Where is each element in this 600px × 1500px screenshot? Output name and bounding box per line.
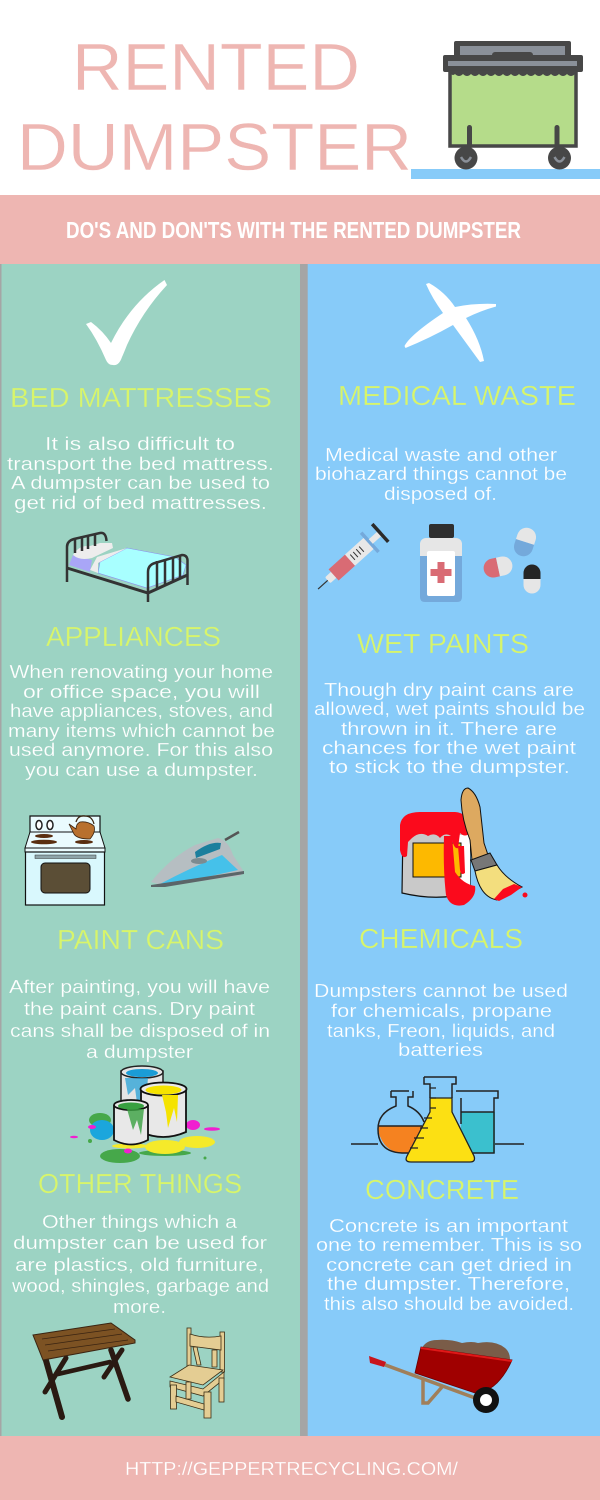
text: paint cans: cans shall be disposed of in (10, 1021, 270, 1041)
text: other things: more. (113, 1297, 166, 1317)
icon: paint cans with splatter (70, 1066, 220, 1163)
title: RENTED (72, 30, 360, 105)
text: other things: are plastics, old furniture, (15, 1255, 264, 1275)
text: bed mattresses: A dumpster can be used to (11, 473, 270, 493)
text: appliances (8, 662, 275, 780)
text: wet paints: allowed, wet paints should be (314, 699, 585, 719)
icon: syringe (309, 522, 390, 599)
text: wet paints: thrown in it. There are (341, 719, 557, 739)
text: chemicals (314, 981, 568, 1060)
text: concrete: one to remember. This is so (316, 1235, 582, 1255)
icon: cross mark (404, 283, 496, 362)
icon: check mark (86, 280, 167, 365)
text: other things: wood, shingles, garbage and (11, 1276, 269, 1296)
text: paint cans (9, 977, 270, 1062)
text: wet paints: Though dry paint cans are (324, 680, 574, 700)
blue ground bar (411, 169, 600, 179)
title (17, 30, 412, 185)
heading: chemicals: CHEMICALS (359, 923, 523, 954)
text: paint cans: the paint cans. Dry paint (24, 999, 255, 1019)
panel: do's (0, 264, 300, 1436)
text: appliances: used anymore. For this also (9, 740, 273, 760)
footer band: HTTP://GEPPERTRECYCLING.COM/ (125, 1459, 458, 1479)
text: wet paints (314, 680, 585, 777)
heading: medical waste: MEDICAL WASTE (338, 380, 576, 411)
icon: bed (67, 533, 188, 602)
text: medical waste: biohazard things cannot be (315, 464, 567, 484)
text: concrete (316, 1216, 582, 1314)
text: chemicals: Dumpsters cannot be used (314, 981, 568, 1001)
heading: concrete: CONCRETE (365, 1174, 519, 1205)
heading: bed mattresses: BED MATTRESSES (10, 382, 272, 413)
text: concrete: the dumpster. Therefore, (327, 1274, 570, 1294)
subtitle band (0, 195, 600, 264)
text: paint cans: After painting, you will have (9, 977, 270, 997)
column divider (300, 264, 308, 1436)
text: wet paints: chances for the wet paint (322, 738, 576, 758)
text: other things (11, 1212, 269, 1317)
text: medical waste (315, 445, 567, 504)
icon: wheelbarrow (369, 1340, 512, 1413)
icon: iron (151, 832, 244, 887)
heading: wet paints: WET PAINTS (357, 628, 529, 659)
text: concrete: this also should be avoided. (324, 1294, 574, 1314)
icon: medicine bottle (420, 524, 462, 602)
footer band (0, 1436, 600, 1500)
icon: lab flasks (351, 1077, 524, 1162)
heading: other things: OTHER THINGS (38, 1168, 242, 1199)
text: bed mattresses: transport the bed mattress. (7, 454, 274, 474)
title: DUMPSTER (17, 110, 412, 185)
text: appliances: or office space, you will (23, 682, 260, 702)
text: appliances: you can use a dumpster. (25, 760, 258, 780)
text: medical waste: Medical waste and other (325, 445, 557, 465)
text: chemicals: batteries (398, 1040, 483, 1060)
icon: wooden table (33, 1323, 135, 1417)
text: chemicals: for chemicals, propane (331, 1001, 552, 1021)
text: other things: dumpster can be used for (13, 1233, 267, 1253)
text: bed mattresses (7, 434, 274, 513)
text: bed mattresses: get rid of bed mattresses. (14, 493, 267, 513)
text: concrete: Concrete is an important (329, 1216, 568, 1236)
text: bed mattresses: It is also difficult to (45, 434, 235, 454)
icon: pills (482, 525, 540, 594)
text: other things: Other things which a (42, 1212, 238, 1232)
heading: appliances: APPLIANCES (46, 621, 221, 652)
text: chemicals: tanks, Freon, liquids, and (327, 1021, 555, 1041)
text: wet paints: to stick to the dumpster. (329, 757, 570, 777)
text: appliances: When renovating your home (10, 662, 273, 682)
text: medical waste: disposed of. (384, 484, 497, 504)
icon: wet paint can and brush (400, 788, 528, 906)
icon: stove (25, 816, 105, 905)
text: appliances: many items which cannot be (8, 721, 275, 741)
icon: dumpster (443, 41, 583, 170)
text: appliances: have appliances, stoves, and (10, 701, 273, 721)
text: paint cans: a dumpster (86, 1042, 193, 1062)
icon: wooden chair (170, 1328, 224, 1418)
text: concrete: concrete can get dried in (326, 1255, 572, 1275)
panel: don'ts (308, 264, 600, 1436)
heading: paint cans: PAINT CANS (57, 924, 224, 955)
